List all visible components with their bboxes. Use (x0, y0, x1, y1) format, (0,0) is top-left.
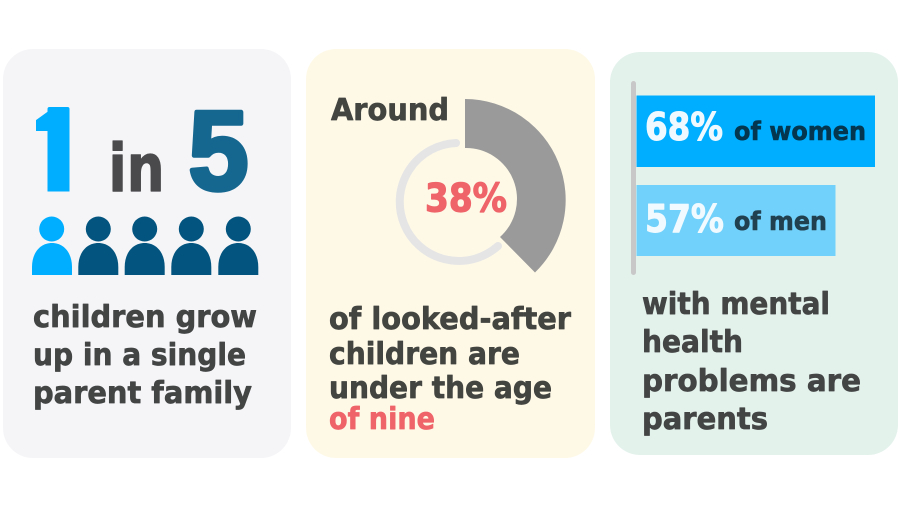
heading: 1 in 5: in (108, 130, 164, 207)
bar: 68% of women (636, 96, 875, 167)
text: children grow up in a single parent family: parent family (33, 376, 252, 411)
text: of looked-after children are under the age of nine: children are (329, 337, 520, 372)
text: of looked-after children are under the age of nine: of nine (329, 402, 435, 437)
bar: 57% of men: 57% (645, 197, 724, 241)
text: Around: Around (331, 93, 449, 128)
chart: 38% donut (400, 99, 566, 272)
text: of looked-after children are under the age of nine: under the age (329, 371, 552, 406)
text: 38%: 38% (425, 176, 507, 222)
text: with mental health problems are parents: parents (642, 402, 768, 437)
text: with mental health problems are parents (642, 287, 861, 437)
text: of looked-after children are under the age of nine (329, 302, 571, 437)
text: with mental health problems are parents: with mental (642, 287, 830, 322)
bar: 68% of women: 68% (645, 105, 723, 149)
bar: 68% of women: of women (734, 117, 866, 147)
text: children grow up in a single parent family (33, 300, 257, 411)
text: children grow up in a single parent family: children grow (33, 300, 257, 335)
bar: 57% of men (636, 185, 836, 256)
icon: row of five people (32, 216, 258, 275)
heading: 1 in 5: 1 (29, 88, 85, 212)
heading: 1 in 5: 5 (188, 88, 248, 214)
panel: single parent families (3, 49, 291, 458)
text: with mental health problems are parents: health (642, 325, 743, 360)
bar: 57% of men: of men (734, 207, 827, 237)
chart: bars for women and men (631, 81, 875, 275)
text: children grow up in a single parent family: up in a single (33, 338, 246, 373)
panel: looked-after children (306, 49, 595, 458)
heading: 1 in 5 (36, 107, 248, 193)
text: of looked-after children are under the age of nine: of looked-after (329, 302, 571, 337)
text: with mental health problems are parents: problems are (642, 364, 861, 399)
panel: parents with mental health problems (610, 52, 898, 455)
